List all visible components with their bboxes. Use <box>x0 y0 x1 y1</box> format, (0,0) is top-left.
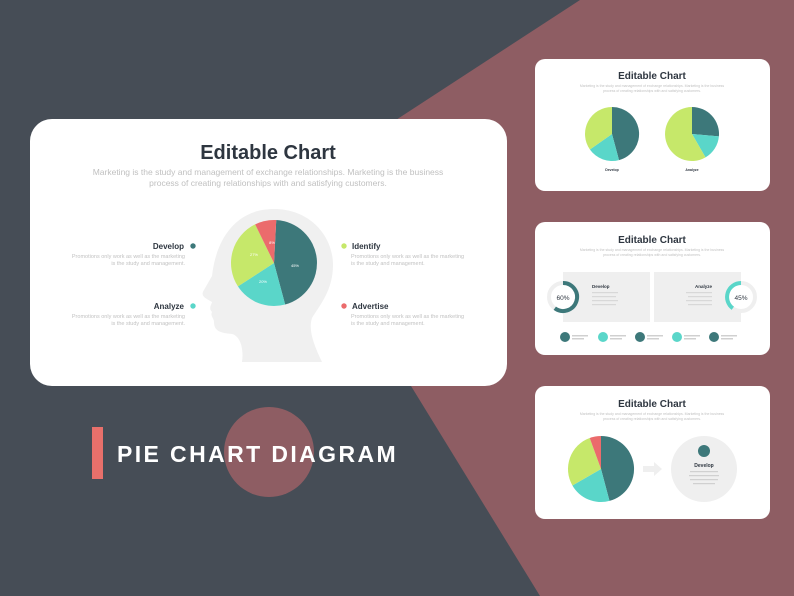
icons row <box>560 332 737 342</box>
pie: develop <box>585 107 639 172</box>
legend: Identify: Identify <box>352 242 381 251</box>
legend: Develop: Develop <box>153 242 184 251</box>
panel: card 3 pie and detail: Editable Chart <box>618 399 687 410</box>
legend: Advertise <box>341 302 464 327</box>
legend: Analyze: Analyze <box>154 302 185 311</box>
legend: Develop: is the study and management. <box>111 261 185 267</box>
pie chart: 8% <box>269 240 275 245</box>
pie: analyze: Analyze <box>685 168 699 172</box>
panel: card 2 donuts: process of creating relationships with and satisfying customers. <box>603 253 701 257</box>
legend: Advertise: Advertise <box>352 302 389 311</box>
pie chart <box>231 220 317 306</box>
subtitle: Marketing is the study and management of exchange relationships. Marketing is the business <box>93 167 443 177</box>
panel: card 2 donuts <box>535 222 770 355</box>
panel: card 1 two pies <box>535 59 770 191</box>
panel: card 3 pie and detail <box>535 386 770 519</box>
legend: Identify: Promotions only work as well as the marketing <box>351 254 464 260</box>
pie: develop: Develop <box>605 168 619 172</box>
panel: card 3 pie and detail: Marketing is the study and management of exchange relationships. Marketing is the business <box>580 412 724 416</box>
panel: card 1 two pies: process of creating relationships with and satisfying customers. <box>603 89 701 93</box>
panel: card 3 pie and detail: process of creating relationships with and satisfying customers. <box>603 417 701 421</box>
title: Editable Chart <box>200 142 336 164</box>
legend: Analyze: Promotions only work as well as the marketing <box>72 314 185 320</box>
legend: Identify <box>341 242 464 267</box>
panel: card 2 donuts: Develop <box>592 284 610 289</box>
panel: card 2 donuts: Analyze <box>695 284 712 289</box>
legend: Analyze: is the study and management. <box>111 321 185 327</box>
icon: head silhouette <box>203 209 333 362</box>
decorative circle <box>224 407 314 497</box>
detail circle: Develop <box>694 463 714 469</box>
panel: main card <box>30 119 507 386</box>
subtitle <box>93 167 443 188</box>
pie <box>568 436 634 502</box>
accent bar <box>92 427 103 479</box>
donut 45%: 45% <box>734 295 748 302</box>
legend: Develop <box>72 242 196 267</box>
legend: Advertise: Promotions only work as well as the marketing <box>351 314 464 320</box>
pie chart: 20% <box>259 279 267 284</box>
panel: card 2 donuts: Editable Chart <box>618 235 687 246</box>
heading: PIE CHART DIAGRAM: PIE CHART DIAGRAM <box>117 441 398 467</box>
panel: card 2 donuts: Marketing is the study and management of exchange relationships. Marketing is the business <box>580 248 724 252</box>
legend: Advertise: is the study and management. <box>351 321 425 327</box>
panel: card 1 two pies: Editable Chart <box>618 71 687 82</box>
legend: Analyze <box>72 302 196 327</box>
legend: Identify: is the study and management. <box>351 261 425 267</box>
detail circle <box>671 436 737 502</box>
subtitle: process of creating relationships with and satisfying customers. <box>149 178 387 188</box>
legend: Develop: Promotions only work as well as the marketing <box>72 254 185 260</box>
panel: card 1 two pies: Marketing is the study and management of exchange relationships. Marketing is the business <box>580 84 724 88</box>
donut 60%: 60% <box>556 295 570 302</box>
donut 45% <box>727 283 755 311</box>
pie chart: 45% <box>291 263 299 268</box>
donut 60% <box>549 283 577 311</box>
pie chart: 27% <box>250 252 258 257</box>
pie: analyze <box>665 107 719 172</box>
arrow <box>643 462 662 476</box>
